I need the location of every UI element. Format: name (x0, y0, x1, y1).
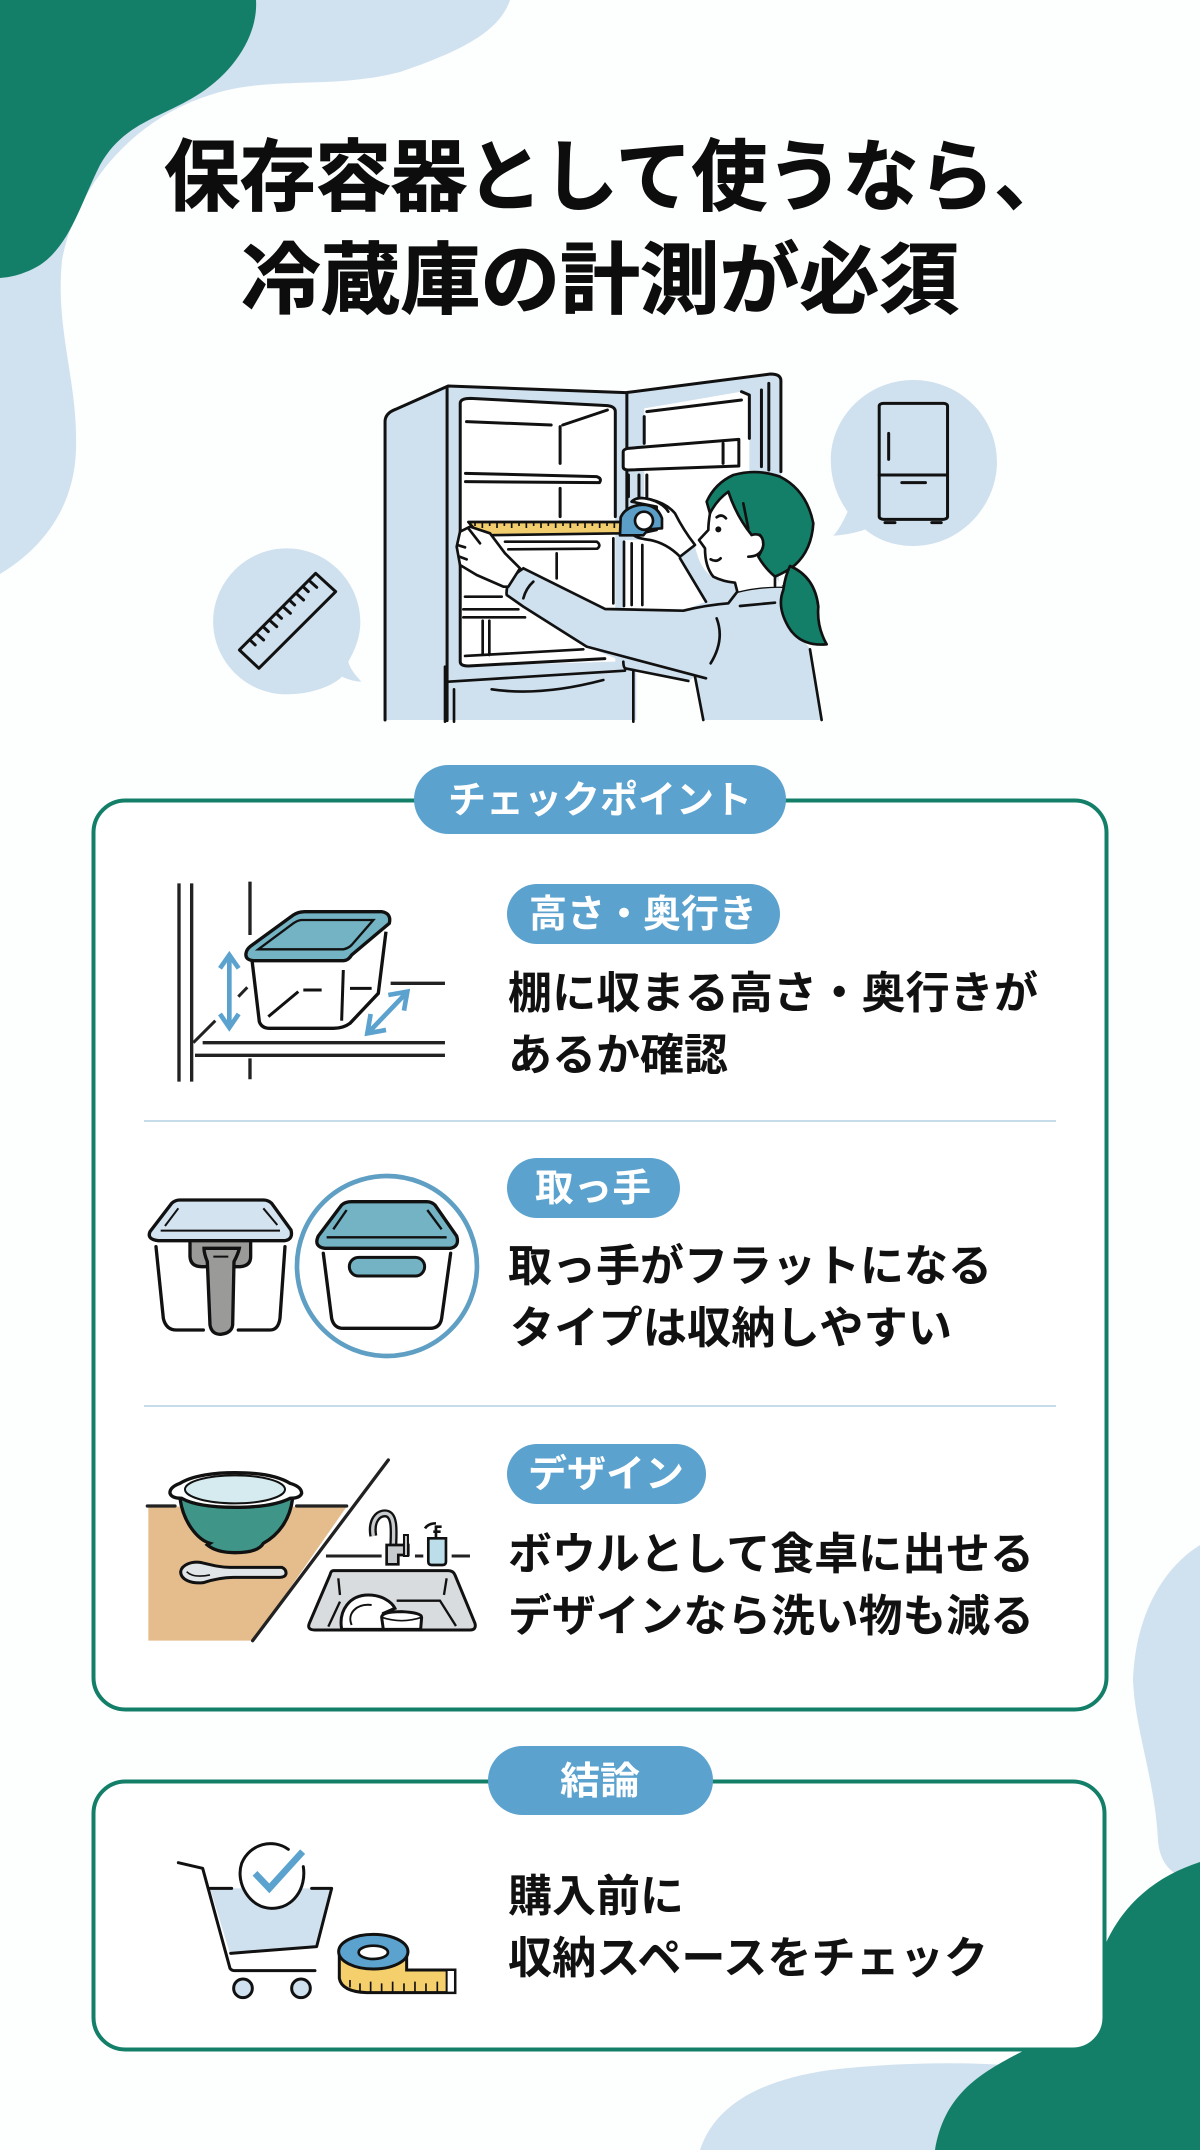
label: handle (507, 1158, 680, 1218)
table with bowl and spoon (147, 1460, 388, 1641)
title (164, 133, 1070, 324)
background blob: light blue right (1133, 1545, 1200, 1880)
divider (144, 1121, 1056, 1406)
illustration: woman measuring fridge (213, 374, 997, 722)
background blob: green top left (0, 0, 256, 278)
text: item 3: デザインなら洗い物も減る (508, 1592, 1034, 1641)
left hand (457, 527, 520, 587)
cart with check (178, 1844, 332, 1998)
icon: container on shelf (179, 882, 445, 1082)
item 2: handle (149, 1158, 992, 1356)
text: conclusion: 購入前に (508, 1872, 684, 1921)
title: 冷蔵庫の計測が必須 (241, 236, 959, 324)
badge: check points heading (414, 765, 786, 834)
text: conclusion: 収納スペースをチェック (508, 1934, 988, 1983)
text: item 2: 取っ手がフラットになる (508, 1242, 992, 1291)
woman's face (699, 492, 783, 592)
panel: check points (94, 765, 1106, 1710)
highlight ring: flat handle container (297, 1176, 477, 1356)
badge: conclusion heading: 結論 (560, 1761, 640, 1803)
speech bubble: ruler (213, 548, 361, 694)
item 1: height and depth (179, 882, 1038, 1082)
text: item 3 (508, 1530, 1034, 1641)
right hand (632, 498, 695, 557)
text: item 1: 棚に収まる高さ・奥行きが (508, 969, 1038, 1018)
woman's body and arms (507, 546, 822, 720)
label: design (507, 1444, 706, 1504)
badge: conclusion heading (488, 1746, 713, 1815)
label: height and depth: 高さ・奥行き (529, 894, 757, 936)
item 3: design (147, 1444, 1034, 1641)
woman's hair (707, 472, 827, 645)
background blob: green bottom right (935, 1862, 1200, 2150)
label: handle: 取っ手 (535, 1168, 651, 1210)
icon: bowl on table and sink (147, 1460, 475, 1641)
tape measure (339, 1934, 455, 1993)
icon: shopping cart and tape measure (178, 1844, 455, 1998)
badge: check points heading: チェックポイント (448, 780, 752, 822)
fridge upper body (385, 374, 781, 721)
text: conclusion (508, 1872, 988, 1983)
title: 保存容器として使うなら、 (164, 133, 1070, 221)
label: design: デザイン (528, 1453, 684, 1496)
icon: two containers (149, 1176, 477, 1356)
panel: conclusion (94, 1746, 1104, 2050)
sink with dishes (309, 1513, 475, 1630)
measuring tape (468, 498, 668, 535)
speech bubble: fridge (831, 380, 997, 546)
background blob: light blue top left (0, 0, 510, 574)
background blob: light blue bottom (700, 2063, 1060, 2150)
text: item 1: あるか確認 (508, 1031, 728, 1080)
text: item 2 (508, 1242, 992, 1353)
fridge shelves (445, 538, 653, 722)
text: item 3: ボウルとして食卓に出せる (508, 1530, 1034, 1579)
container with protruding handle (149, 1200, 291, 1334)
text: item 1 (508, 969, 1038, 1080)
text: item 2: タイプは収納しやすい (510, 1304, 952, 1353)
label: height and depth (507, 884, 780, 944)
fridge lower part, tape and woman (445, 472, 827, 722)
